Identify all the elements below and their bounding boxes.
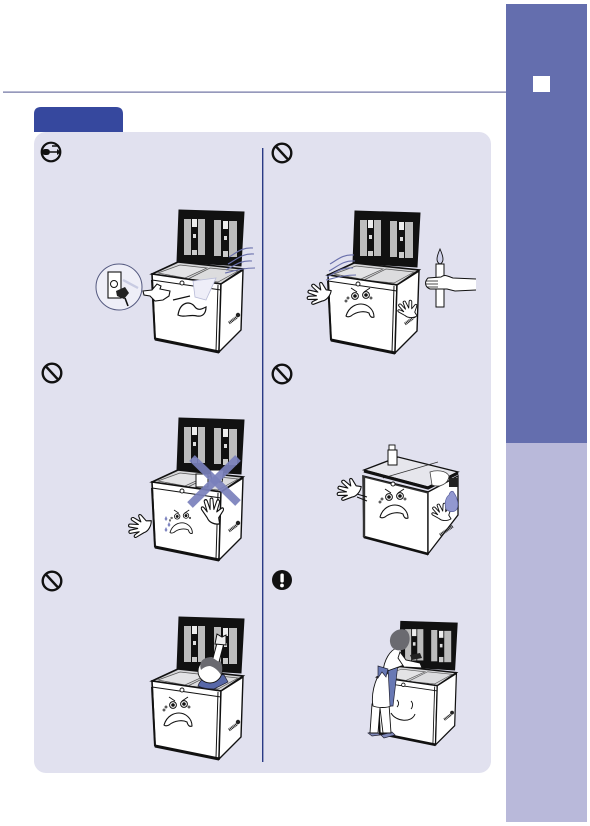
cross mark bbox=[190, 458, 238, 505]
freezer illustration bbox=[152, 210, 244, 352]
sad face bbox=[345, 288, 374, 317]
sidebar: lower band bbox=[506, 443, 587, 822]
closed freezer bbox=[363, 457, 458, 554]
section tab bbox=[34, 107, 123, 132]
icon: mandatory bbox=[272, 570, 292, 590]
bottle on lid bbox=[388, 445, 397, 465]
water drops bbox=[164, 516, 170, 532]
wind lines bbox=[326, 255, 356, 280]
happy face bbox=[391, 700, 415, 720]
panel: candle warning bbox=[273, 144, 476, 353]
sad face bbox=[379, 489, 408, 518]
panel: heavy objects warning bbox=[43, 364, 244, 560]
panel: chemicals warning bbox=[273, 365, 458, 554]
pointing hand bbox=[143, 284, 170, 301]
sad hand on freezer front bbox=[173, 296, 206, 316]
candle in hand bbox=[426, 249, 476, 307]
header rule bbox=[3, 92, 506, 93]
icon: unplug symbol bbox=[42, 143, 61, 161]
icon: prohibited bbox=[43, 364, 61, 382]
icon: prohibited bbox=[43, 572, 61, 590]
sidebar: white square marker bbox=[533, 76, 550, 92]
plug and blue flame bbox=[445, 478, 458, 512]
objects on the freezer bbox=[196, 470, 224, 487]
vertical column divider bbox=[262, 148, 263, 762]
child in the freezer bbox=[198, 634, 228, 689]
freezer illustration bbox=[377, 621, 457, 745]
woman in apron bbox=[368, 629, 422, 738]
right hand bbox=[429, 501, 454, 525]
main panel background bbox=[34, 132, 491, 773]
icon: prohibited bbox=[273, 365, 291, 383]
left hand bbox=[334, 475, 363, 505]
sidebar: upper band bbox=[506, 4, 587, 443]
spark near front bbox=[193, 278, 216, 300]
sad face bbox=[163, 697, 192, 726]
panel: cleaning instruction bbox=[272, 570, 457, 745]
freezer illustration bbox=[328, 211, 420, 353]
sad face bbox=[169, 510, 192, 533]
left hand bbox=[304, 279, 333, 309]
freezer illustration bbox=[152, 617, 244, 759]
callout: plug and socket bbox=[96, 264, 142, 310]
right hand bbox=[201, 498, 223, 524]
wind lines bbox=[225, 248, 255, 273]
panel: unplug warning bbox=[42, 143, 255, 352]
right hand bbox=[395, 298, 420, 322]
panel: child warning bbox=[43, 572, 244, 759]
left hand bbox=[127, 513, 152, 540]
freezer illustration bbox=[152, 418, 244, 560]
icon: prohibited bbox=[273, 144, 291, 162]
